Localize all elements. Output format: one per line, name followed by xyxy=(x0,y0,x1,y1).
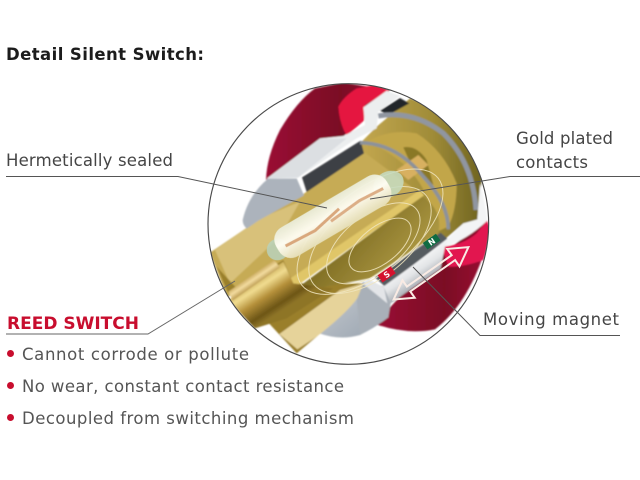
label: gold plated contacts: Gold plated xyxy=(516,129,613,148)
circle outline xyxy=(208,84,489,364)
magnet N label: N xyxy=(427,236,437,248)
gold interior upper right xyxy=(357,98,482,243)
magnet S label xyxy=(378,266,396,283)
grey hub bottom xyxy=(319,282,388,337)
white rim right xyxy=(438,183,487,247)
bullet list xyxy=(7,345,354,428)
magnet S label: S xyxy=(382,269,392,280)
field lines xyxy=(296,168,444,295)
heading: reed switch xyxy=(6,281,235,334)
bright gold strip xyxy=(283,190,424,287)
inner cavity xyxy=(297,196,439,288)
label: moving magnet xyxy=(413,267,620,336)
label: hermetically sealed xyxy=(6,151,327,208)
tan body xyxy=(210,152,420,297)
bullet 3: Decoupled from switching mechanism xyxy=(22,409,354,428)
contact pin right xyxy=(397,155,428,180)
collar top face xyxy=(267,91,400,179)
magnet N label xyxy=(423,234,441,250)
red housing top xyxy=(266,83,390,180)
label: moving magnet: Moving magnet xyxy=(483,310,620,329)
heading: reed switch: REED SWITCH xyxy=(7,314,139,333)
label: gold plated contacts xyxy=(370,129,640,199)
inner brass disc xyxy=(378,132,458,231)
silver ring inner xyxy=(360,143,448,229)
cream edge xyxy=(279,283,364,349)
bullet 2: No wear, constant contact resistance xyxy=(22,377,344,396)
glass reed capsule xyxy=(266,170,404,260)
red housing bottom xyxy=(375,220,491,331)
illustration: reed switch cutaway xyxy=(208,83,491,364)
red highlight top xyxy=(338,85,390,136)
circle background xyxy=(208,84,489,364)
silver ring outer xyxy=(378,115,476,210)
motion arrow xyxy=(392,246,470,301)
title: Detail Silent Switch: xyxy=(6,45,204,64)
label: gold plated contacts: contacts xyxy=(516,153,588,172)
lower-left brass shell xyxy=(217,260,363,353)
brass body xyxy=(228,262,333,328)
grey hub left xyxy=(243,178,304,229)
reed contacts xyxy=(283,209,342,247)
magnet strip xyxy=(375,233,447,287)
contact pin left xyxy=(228,260,280,301)
grey end block xyxy=(358,281,392,321)
black foam insert xyxy=(302,141,364,192)
dark gasket top xyxy=(380,98,409,115)
red highlight bottom xyxy=(442,220,488,267)
bullet 1: Cannot corrode or pollute xyxy=(22,345,249,364)
label: hermetically sealed: Hermetically sealed xyxy=(6,151,173,170)
carrier band xyxy=(383,246,446,304)
